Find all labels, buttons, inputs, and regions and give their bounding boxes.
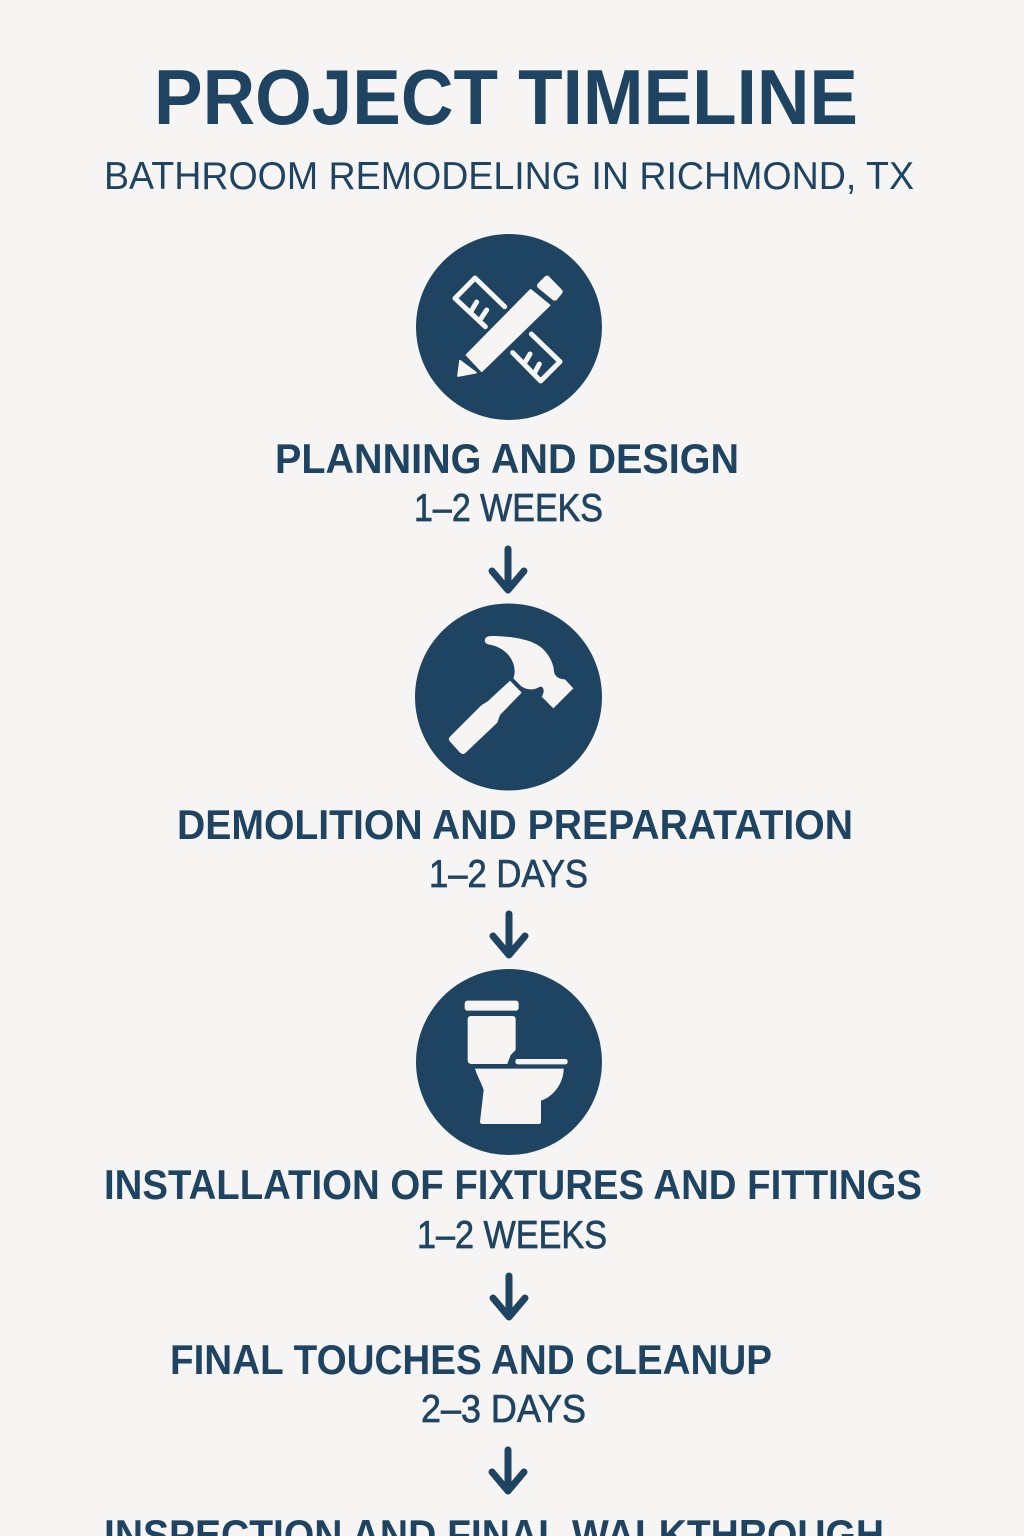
duration: 1-2 weeks: 1–2 WEEKS [414,487,603,530]
heading: installation of fixtures and fittings: INSTALLATION OF FIXTURES AND FITTINGS [104,1161,922,1208]
heading: final touches and cleanup: FINAL TOUCHES AND CLEANUP [170,1336,772,1383]
arrow 2 [493,914,525,955]
arrow 1 [492,549,524,590]
icon: hammer [415,604,602,790]
step 4: final touches and cleanup [170,1336,772,1431]
step 2: demolition and preparation [177,604,853,896]
heading: planning and design: PLANNING AND DESIGN [275,435,739,482]
step 3: installation of fixtures and fittings [104,969,922,1257]
duration: 2-3 days: 2–3 DAYS [421,1388,586,1431]
arrow 3 [493,1276,525,1317]
duration: 1-2 weeks: 1–2 WEEKS [417,1214,607,1257]
icon: pencil and ruler [416,234,602,420]
arrow 4 [492,1450,524,1491]
heading: demolition and preparation: DEMOLITION AND PREPARATATION [177,801,853,848]
icon: toilet [416,969,602,1155]
duration: 1-2 days: 1–2 DAYS [429,853,588,896]
step 1: planning and design [275,234,739,530]
title: PROJECT TIMELINE [154,53,858,141]
subtitle: BATHROOM REMODELING IN RICHMOND, TX [104,155,914,198]
